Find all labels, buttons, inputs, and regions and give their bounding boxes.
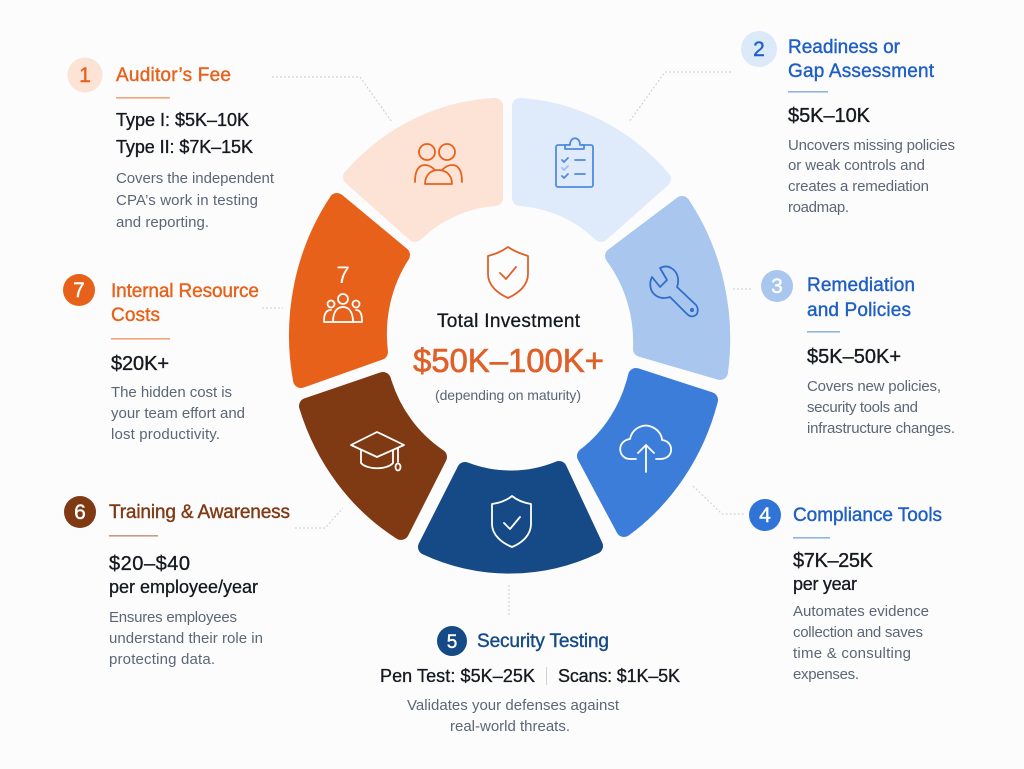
segment 1: auditor's fee	[351, 106, 495, 234]
description 7: lost productivity.	[111, 426, 220, 443]
badge 5: 5	[447, 632, 457, 653]
callout 4: Compliance Tools	[749, 499, 942, 683]
heading 7: Costs	[111, 305, 160, 326]
callout 7: Internal Resource	[63, 274, 259, 443]
icon: team	[324, 294, 362, 322]
heading 6: Training & Awareness	[109, 502, 290, 523]
heading 7: Internal Resource	[111, 281, 259, 302]
description 2: creates a remediation	[788, 178, 929, 195]
badge 7	[63, 274, 95, 306]
segment 7: internal resource	[297, 201, 402, 380]
segment 3: remediation	[613, 204, 722, 372]
prices 1: Type II: $7K–15K	[116, 137, 253, 157]
description 7	[111, 384, 245, 443]
description 3: security tools and	[807, 399, 918, 416]
heading 3: Remediation	[807, 275, 915, 296]
price 4	[793, 550, 874, 594]
heading 2: Readiness or	[788, 37, 901, 58]
prices 5: Scans: $1K–5K	[558, 666, 680, 686]
connector 2	[629, 72, 731, 122]
icon: shield check	[492, 496, 531, 547]
badge 1: 1	[79, 64, 91, 87]
heading 5: Security Testing	[477, 631, 609, 652]
description 7: The hidden cost is	[111, 384, 232, 401]
price 4: per year	[793, 574, 857, 594]
description 6: Ensures employees	[109, 609, 237, 626]
icon: graduation cap	[351, 432, 404, 470]
price 7: $20K+	[111, 353, 169, 375]
description 2: Uncovers missing policies	[788, 137, 955, 154]
price 6: per employee/year	[109, 577, 258, 597]
callout 5: Security Testing	[380, 626, 680, 735]
description 5: real-world threats.	[450, 718, 570, 735]
badge 3	[761, 270, 793, 302]
heading 4: Compliance Tools	[793, 505, 942, 526]
badge 4	[749, 499, 781, 531]
price 4: $7K–25K	[793, 550, 874, 572]
price 6	[109, 553, 258, 597]
callout 1: Auditor's Fee	[68, 58, 275, 231]
description 5	[407, 697, 620, 735]
prices 5: Pen Test: $5K–25K	[380, 666, 535, 686]
description 6: understand their role in	[109, 630, 263, 647]
callout 2: Readiness	[741, 31, 955, 216]
center label: Total Investment	[437, 311, 581, 332]
icon: center shield	[488, 247, 528, 298]
badge 6	[64, 496, 96, 528]
description 2: or weak controls and	[788, 157, 925, 174]
description 1: Covers the independent	[116, 170, 275, 187]
description 4: collection and saves	[793, 624, 923, 641]
connector 4	[693, 486, 745, 514]
callout 6: Training	[64, 496, 290, 668]
prices 5	[380, 666, 680, 686]
price 3: $5K–50K+	[807, 346, 901, 368]
badge 2	[741, 31, 777, 67]
heading 2	[788, 37, 935, 82]
description 4: expenses.	[793, 666, 859, 683]
description 3: infrastructure changes.	[807, 420, 955, 437]
heading 3	[807, 275, 915, 321]
prices 1	[116, 110, 253, 157]
description 2	[788, 137, 955, 216]
icon: two people	[415, 144, 462, 184]
description 2: roadmap.	[788, 199, 849, 216]
price 2: $5K–10K	[788, 105, 871, 127]
heading 2: Gap Assessment	[788, 61, 935, 82]
badge 1	[68, 58, 102, 92]
description 1	[116, 170, 275, 231]
heading 7	[111, 281, 259, 326]
description 4: Automates evidence	[793, 603, 929, 620]
description 1: and reporting.	[116, 214, 209, 231]
connector 6	[295, 508, 343, 528]
icon: wrench	[650, 266, 698, 316]
panel: donut chart	[297, 106, 722, 566]
segment 4: compliance tools	[585, 376, 710, 529]
description 5: Validates your defenses against	[407, 697, 620, 714]
description 3: Covers new policies,	[807, 378, 941, 395]
segment number: 7	[336, 262, 350, 289]
prices 1: Type I: $5K–10K	[116, 110, 249, 130]
badge 2: 2	[753, 38, 765, 61]
center amount: $50K–100K+	[413, 342, 604, 379]
panel: center total	[413, 247, 604, 403]
connector 7	[262, 307, 283, 309]
description 7: your team effort and	[111, 405, 245, 422]
badge 5	[437, 626, 467, 656]
segment 5: security testing	[426, 469, 595, 566]
description 3	[807, 378, 955, 437]
segment 6: training	[307, 380, 439, 532]
description 4	[793, 603, 929, 683]
callout 3: Remediation	[761, 270, 955, 437]
icon: cloud upload	[620, 426, 671, 472]
segment 2: readiness	[520, 106, 663, 234]
price 6: $20–$40	[109, 553, 190, 575]
icon: clipboard	[556, 138, 593, 187]
badge 3: 3	[771, 275, 783, 298]
heading 3: and Policies	[807, 300, 911, 321]
connector 3	[733, 288, 752, 290]
connector 1	[272, 77, 392, 122]
badge 4: 4	[759, 504, 771, 527]
heading 1: Auditor’s Fee	[116, 65, 231, 86]
description 6: protecting data.	[109, 651, 215, 668]
description 1: CPA’s work in testing	[116, 192, 258, 209]
badge 7: 7	[73, 279, 85, 302]
connector 5	[508, 585, 510, 617]
badge 6: 6	[74, 501, 86, 524]
description 6	[109, 609, 263, 668]
center note: (depending on maturity)	[435, 387, 581, 403]
description 4: time & consulting	[793, 645, 911, 662]
